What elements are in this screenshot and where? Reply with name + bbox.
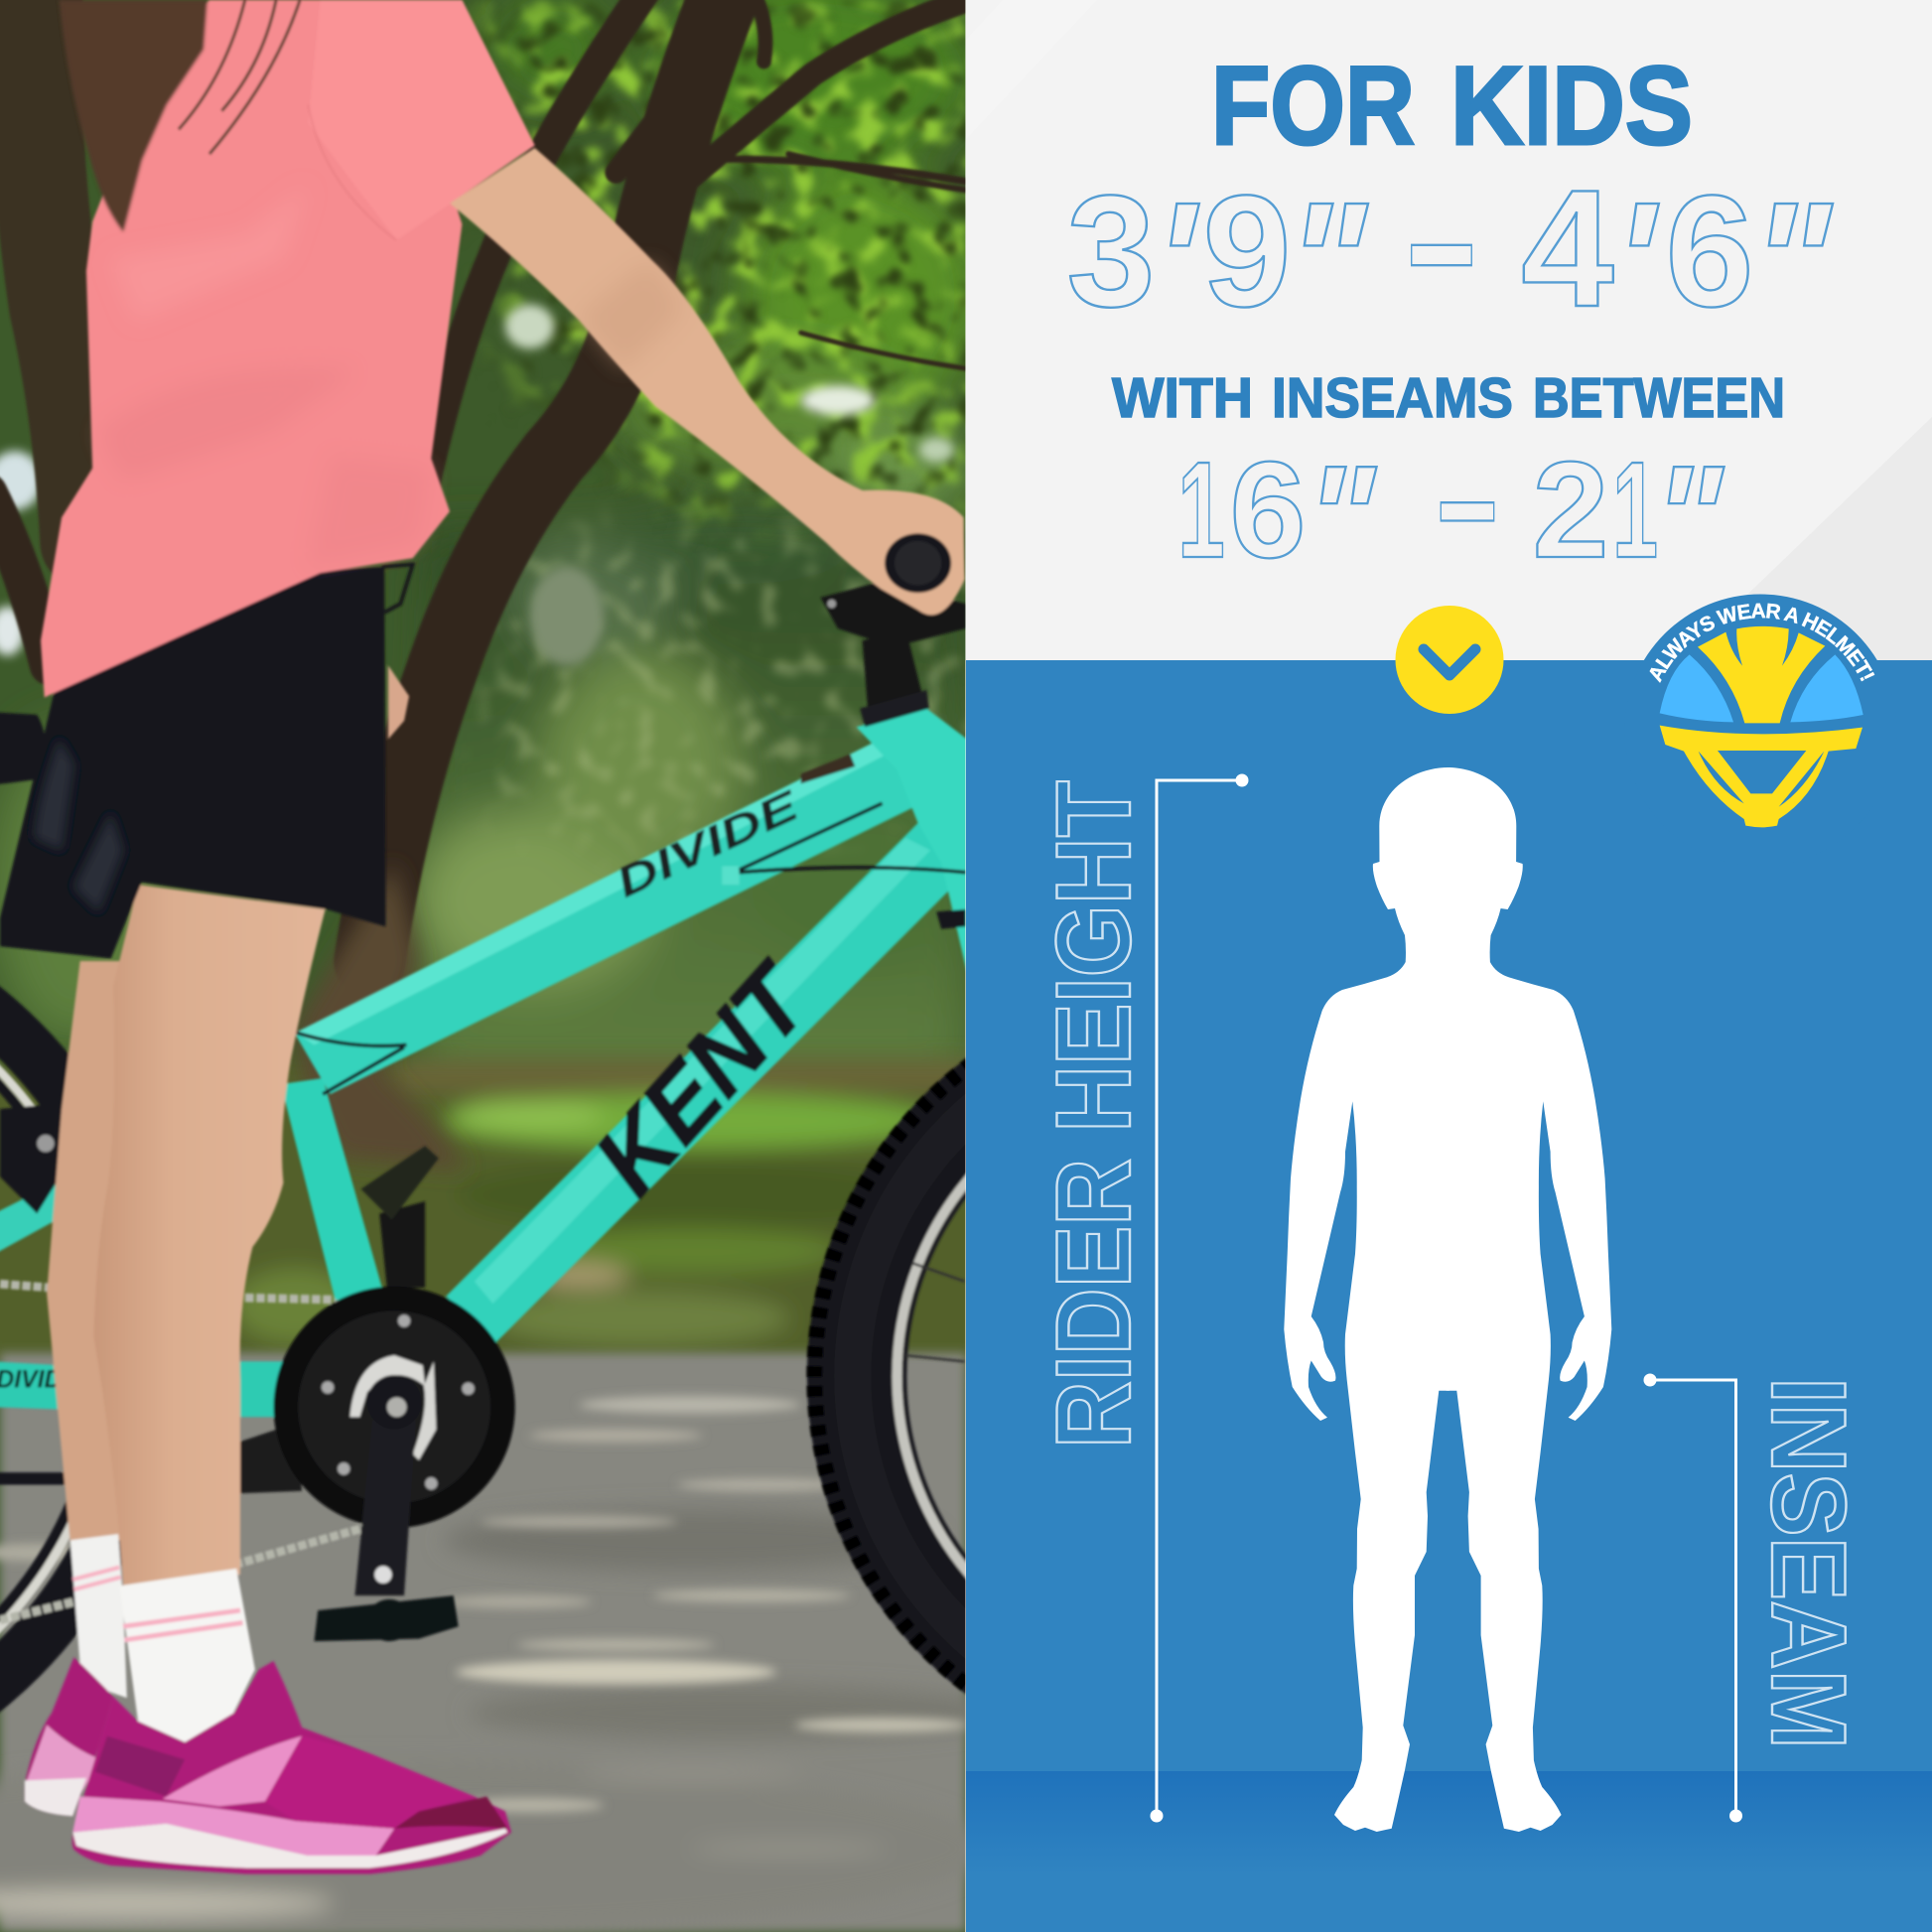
height range outlined text: 4	[1521, 155, 1614, 342]
road surface	[0, 1353, 1011, 1932]
pedal	[314, 1595, 459, 1641]
KENT logo on down tube: KENT	[573, 942, 833, 1214]
inseam range outlined text	[1177, 396, 1725, 601]
rider height bracket line	[1150, 774, 1249, 1823]
inseam range outlined text: 6	[1230, 434, 1306, 587]
inseam range outlined text: –	[1438, 396, 1497, 601]
title: FOR KIDS: KIDS	[1450, 44, 1693, 168]
back shoe	[25, 1657, 113, 1816]
front sock	[119, 1569, 255, 1742]
icon: helmet badge: ALWAYS WEAR A HELMET!	[1650, 604, 1874, 683]
floor band	[966, 1771, 1932, 1932]
photo panel: girl with teal bike	[0, 0, 965, 1932]
DIVIDE logo on top tube: DIVIDE	[609, 780, 807, 906]
icon: yellow circle with chevron	[1396, 606, 1503, 714]
inseam range outlined text: "	[1653, 436, 1725, 600]
back sock	[70, 1534, 127, 1698]
height range outlined text	[1067, 126, 1834, 356]
arm and hand	[450, 148, 965, 615]
inseam range outlined text: 1	[1612, 434, 1658, 587]
right panel: top grey background	[966, 0, 1932, 661]
icon: helmet badge	[1644, 594, 1877, 828]
title: FOR KIDS	[1211, 44, 1693, 168]
photo background: foliage	[0, 0, 986, 1932]
height range outlined text: –	[1408, 126, 1475, 353]
height range outlined text: 3	[1067, 162, 1155, 340]
handlebar grip	[885, 533, 951, 593]
inseam label: INSEAM	[1749, 1377, 1868, 1749]
title: FOR KIDS: FOR	[1211, 44, 1415, 168]
height range outlined text: 9	[1203, 162, 1291, 340]
height range outlined text: "	[1287, 168, 1369, 356]
tree trunks and branches	[0, 0, 986, 961]
right wheel tyre	[804, 1056, 965, 1696]
height range outlined text: "	[1751, 168, 1834, 356]
front shoe	[72, 1661, 511, 1874]
rear stays and derailleur	[0, 1103, 281, 1484]
far crank and pedal	[361, 1146, 439, 1288]
shorts	[0, 564, 413, 959]
right panel: blue background	[966, 660, 1932, 1932]
subheading: with inseams between: WITH	[1112, 366, 1253, 429]
height range outlined text: '	[1155, 168, 1200, 356]
subheading: with inseams between	[1112, 366, 1785, 429]
subheading: with inseams between: INSEAMS	[1272, 366, 1513, 429]
tree trunk base	[296, 863, 469, 1171]
saddle	[0, 712, 46, 785]
handlebar stem and grip	[821, 582, 966, 727]
child silhouette	[1284, 767, 1611, 1832]
height range outlined text: 6	[1666, 162, 1753, 340]
bike chain	[0, 1284, 363, 1620]
hair	[60, 0, 302, 231]
bike frame	[234, 709, 967, 1417]
back leg	[47, 961, 138, 1543]
inseam bracket line	[1644, 1374, 1742, 1823]
height range outlined text: '	[1614, 168, 1660, 356]
subheading: with inseams between: BETWEEN	[1533, 366, 1785, 429]
rider height label: RIDER HEIGHT	[1034, 780, 1153, 1449]
inseam range outlined text: "	[1306, 436, 1377, 600]
front leg	[93, 885, 326, 1587]
inseam range outlined text: 2	[1533, 434, 1608, 587]
inseam range outlined text: 1	[1177, 434, 1225, 587]
pink shirt	[41, 0, 535, 697]
left wheel tyre	[0, 913, 148, 1785]
chainring guard and crank	[240, 1287, 515, 1595]
photo background: lawn	[0, 1059, 998, 1368]
